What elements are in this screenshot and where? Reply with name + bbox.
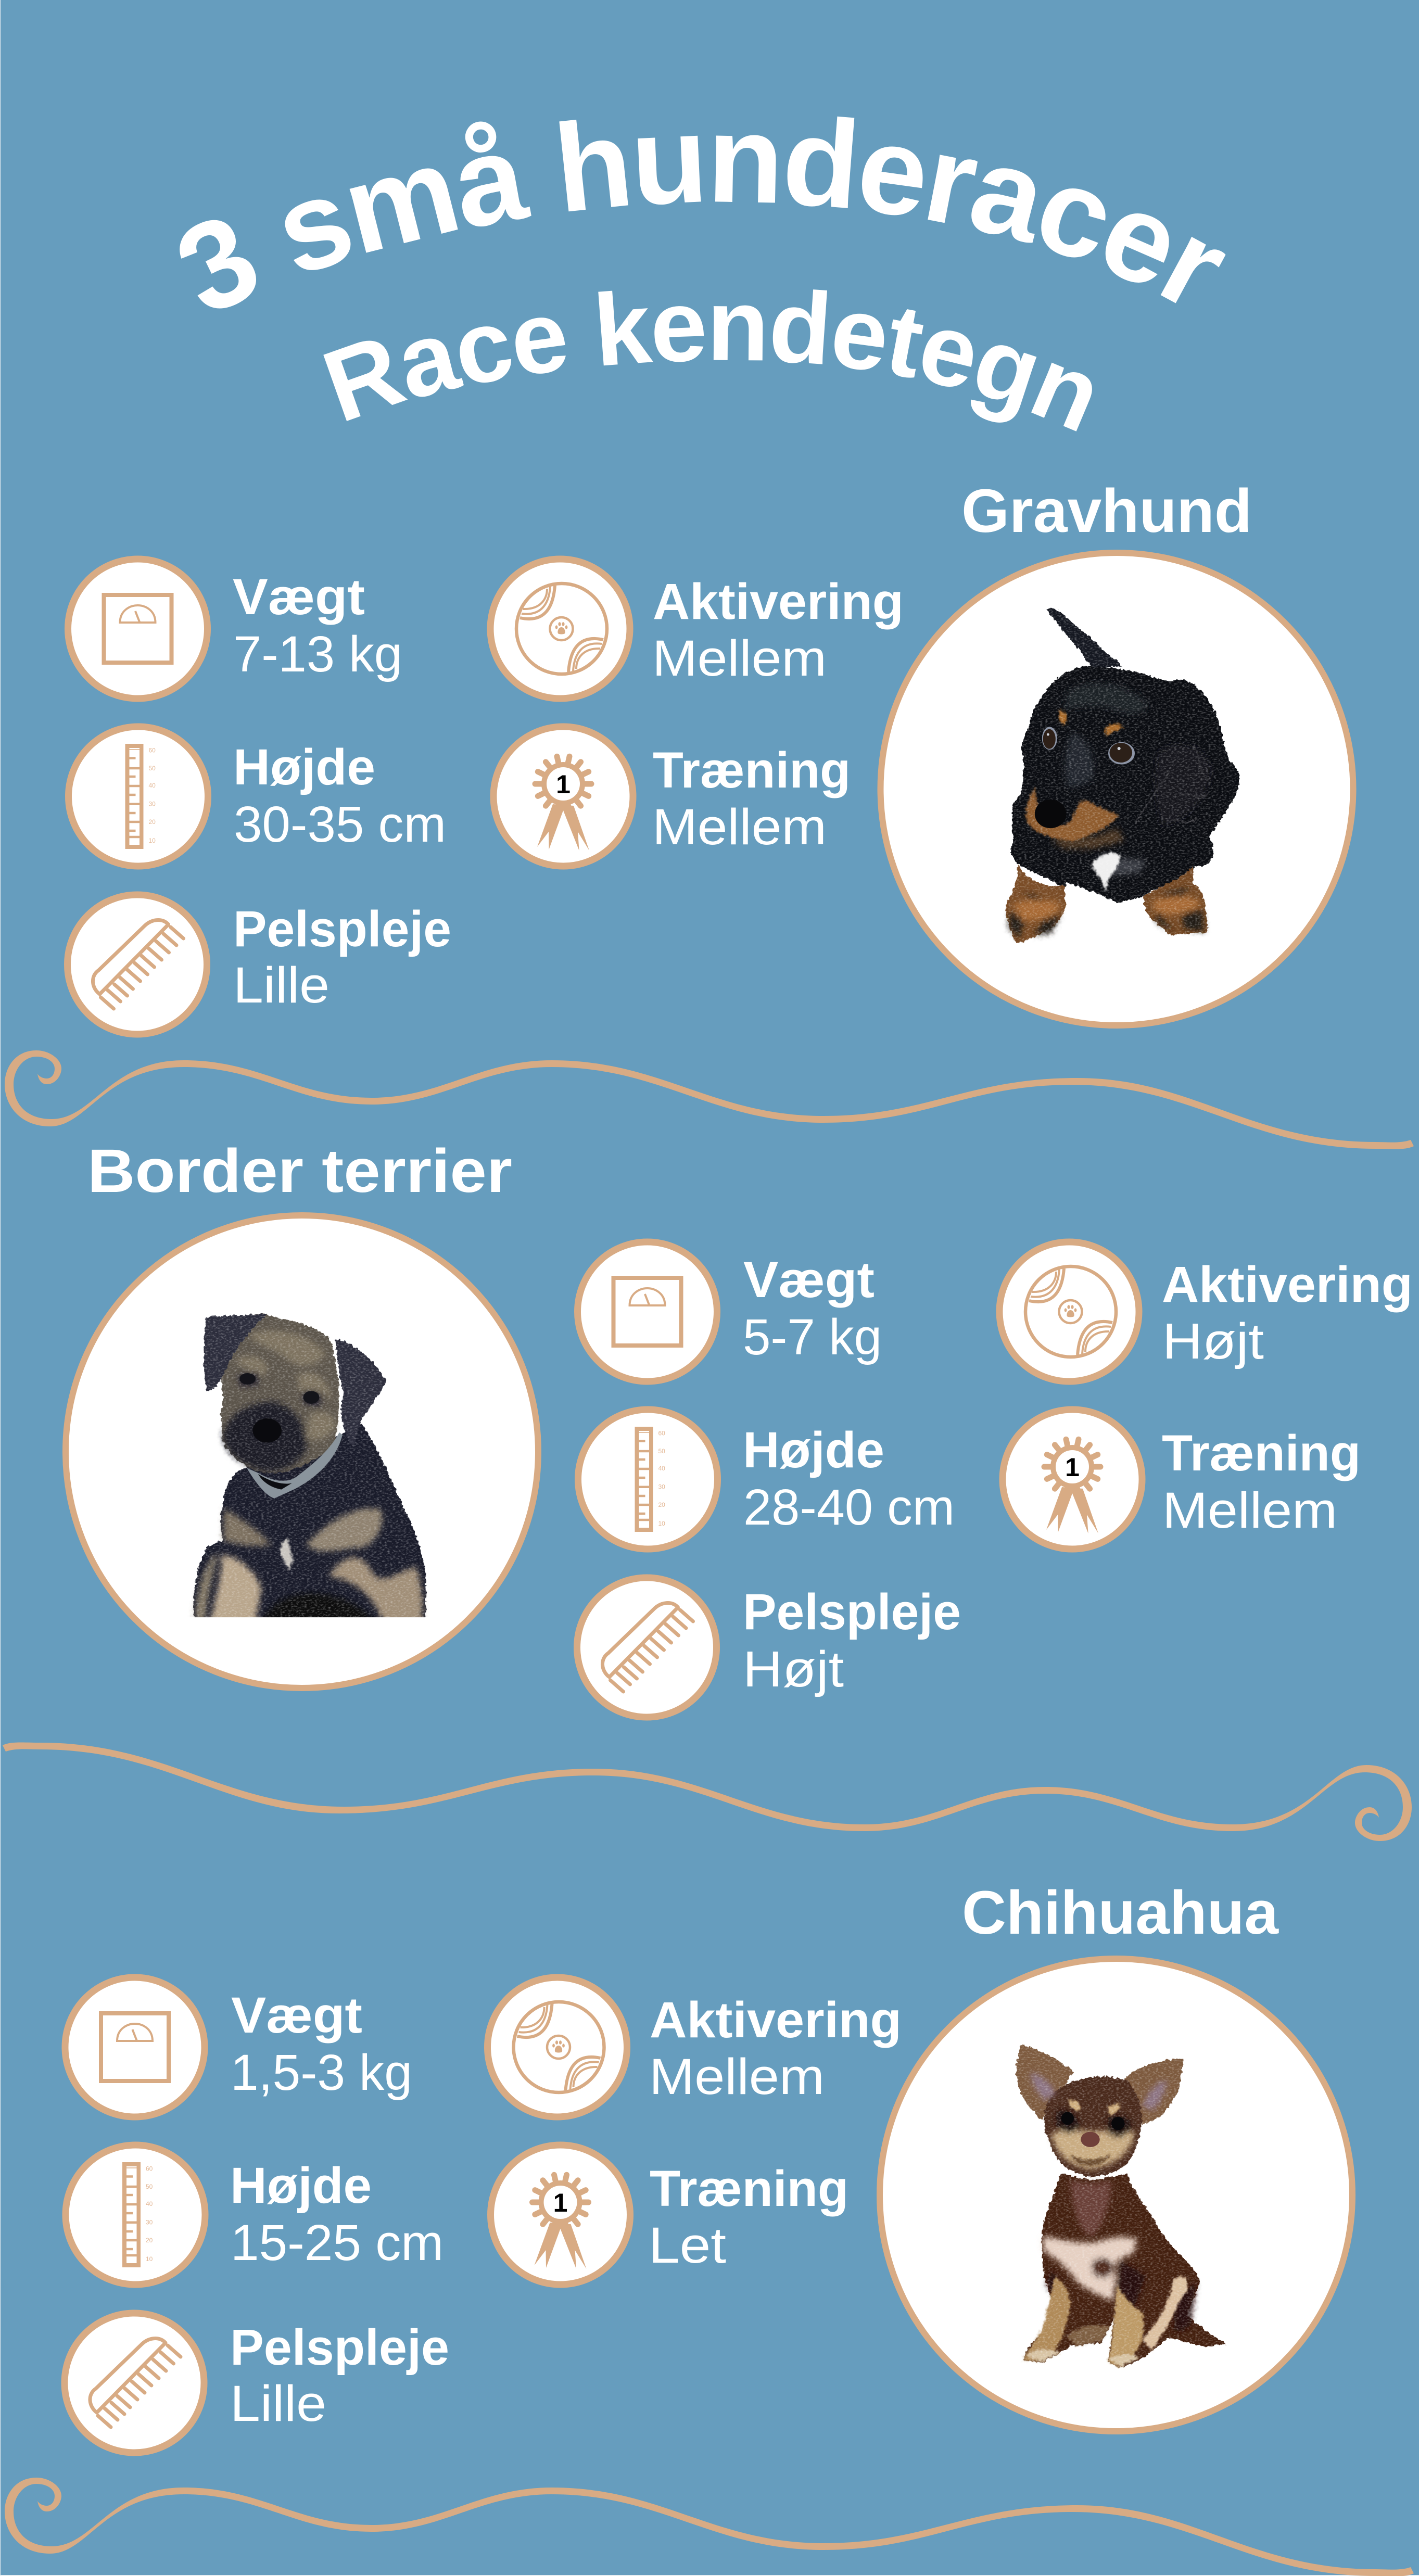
icon: ruler	[578, 1410, 717, 1549]
icon: weight scale	[578, 1242, 717, 1381]
icon: ruler: 50	[149, 765, 156, 772]
text: træning	[652, 742, 851, 855]
text: pelspleje: Højt	[743, 1641, 844, 1697]
panel: gravhund	[68, 477, 1353, 1034]
icon: ruler: 40	[658, 1465, 665, 1472]
icon: ruler: 30	[149, 800, 156, 807]
text: pelspleje	[230, 2319, 449, 2432]
icon: ruler: 60	[146, 2165, 153, 2173]
icon: ruler: 60	[149, 746, 156, 754]
icon: ruler: 50	[658, 1448, 665, 1455]
icon: ruler: 50	[146, 2183, 153, 2190]
icon: rosette	[493, 727, 633, 866]
text: vægt: Vægt	[233, 568, 365, 625]
icon: ruler: 10	[146, 2255, 153, 2263]
icon: ball	[487, 1977, 627, 2117]
text: pelspleje: Pelspleje	[743, 1583, 961, 1640]
heading: border terrier: Border terrier	[87, 1137, 512, 1205]
icon: rosette: 1	[553, 2188, 567, 2217]
text: pelspleje: Lille	[230, 2375, 326, 2432]
icon: comb	[68, 895, 207, 1034]
text: højde	[233, 739, 446, 853]
icon: rosette	[1003, 1410, 1142, 1549]
photo circle: gravhund	[881, 553, 1353, 1025]
text: pelspleje: Lille	[233, 957, 330, 1013]
text: vægt: Vægt	[743, 1251, 875, 1308]
icon: ruler: 30	[658, 1483, 665, 1490]
icon: rosette	[490, 2145, 630, 2285]
icon: ruler: 20	[149, 818, 156, 826]
title: Race kendetegn	[323, 289, 1092, 432]
text: højde: 15-25 cm	[231, 2214, 444, 2271]
text: træning: Mellem	[652, 798, 827, 855]
text: aktivering	[652, 573, 904, 687]
panel: chihuahua	[65, 1879, 1352, 2453]
icon: ball	[490, 559, 630, 699]
text: træning: Mellem	[1162, 1482, 1337, 1539]
text: højde: 28-40 cm	[743, 1479, 955, 1536]
dog: border terrier puppy	[193, 1314, 426, 1625]
icon: rosette: 1	[556, 770, 571, 799]
text: højde: 30-35 cm	[234, 796, 446, 853]
text: træning: Let	[649, 2217, 726, 2274]
text: vægt	[231, 1987, 412, 2101]
wave divider: middle	[3, 1742, 1412, 1841]
text: aktivering	[1162, 1256, 1413, 1369]
text: vægt: Vægt	[231, 1987, 362, 2044]
text: pelspleje: Pelspleje	[230, 2319, 449, 2376]
text: træning	[649, 2160, 848, 2274]
text: aktivering: Mellem	[652, 630, 827, 687]
heading: gravhund: Gravhund	[961, 477, 1252, 545]
icon: ball	[999, 1242, 1139, 1381]
title	[180, 117, 1225, 432]
text: pelspleje: Pelspleje	[233, 900, 451, 957]
text: træning	[1162, 1425, 1361, 1539]
dog: dachshund puppy	[1006, 608, 1240, 944]
icon: ruler: 40	[149, 782, 156, 789]
text: højde	[743, 1422, 955, 1536]
text: vægt: 7-13 kg	[233, 626, 402, 682]
text: højde	[230, 2157, 444, 2271]
text: vægt: 1,5-3 kg	[231, 2044, 412, 2101]
text: højde: Højde	[233, 739, 375, 795]
icon: comb	[65, 2313, 204, 2453]
icon: ruler: 10	[658, 1520, 665, 1527]
icon: ruler: 20	[658, 1501, 665, 1508]
text: pelspleje	[743, 1583, 961, 1697]
heading: chihuahua: Chihuahua	[962, 1879, 1279, 1947]
text: aktivering: Højt	[1162, 1313, 1264, 1369]
icon: weight scale	[65, 1977, 205, 2117]
icon: ruler: 20	[146, 2237, 153, 2244]
icon: rosette: 1	[1065, 1453, 1080, 1482]
photo circle: chihuahua	[880, 1959, 1352, 2431]
dog: chihuahua puppy	[1016, 2045, 1227, 2368]
text: træning: Træning	[650, 2160, 848, 2217]
text: vægt: 5-7 kg	[743, 1309, 882, 1365]
text: aktivering: Mellem	[649, 2048, 825, 2105]
text: vægt	[233, 568, 402, 682]
wave divider: top	[5, 1050, 1414, 1149]
text: træning: Træning	[1162, 1425, 1361, 1481]
text: vægt	[743, 1251, 882, 1365]
text: aktivering: Aktivering	[653, 573, 904, 630]
text: træning: Træning	[653, 742, 851, 798]
text: aktivering	[649, 1991, 902, 2105]
icon: ruler	[66, 2145, 205, 2285]
text: pelspleje	[233, 900, 451, 1013]
panel: border terrier	[66, 1137, 1413, 1717]
text: højde: Højde	[230, 2157, 372, 2214]
text: højde: Højde	[743, 1422, 884, 1478]
icon: ruler: 40	[146, 2200, 153, 2207]
wave divider: bottom	[5, 2478, 1414, 2576]
icon: ruler	[69, 727, 208, 866]
text: aktivering: Aktivering	[650, 1991, 902, 2048]
icon: ruler: 10	[149, 837, 156, 844]
icon: ruler: 30	[146, 2218, 153, 2226]
icon: ruler: 60	[658, 1429, 665, 1437]
photo circle: border terrier	[66, 1215, 538, 1688]
title: 3 små hunderacer	[180, 117, 1225, 308]
text: aktivering: Aktivering	[1162, 1256, 1413, 1313]
icon: weight scale	[68, 559, 207, 699]
icon: comb	[577, 1578, 716, 1717]
